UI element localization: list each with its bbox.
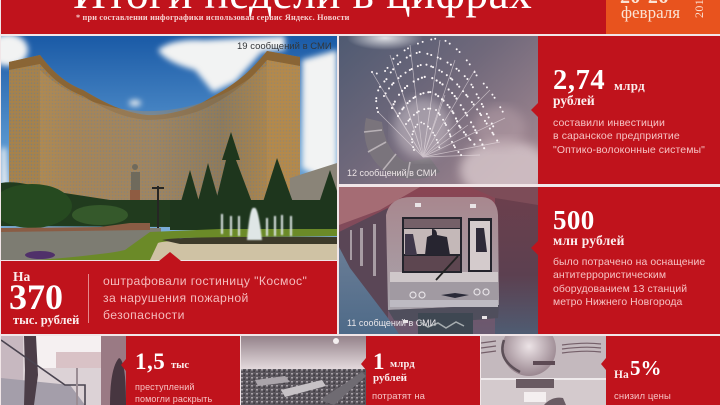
investment text — [553, 117, 705, 156]
caption: 11 messages: 11 сообщений в СМИ — [347, 318, 436, 328]
date box — [606, 0, 720, 34]
panel: metro photo — [339, 187, 538, 334]
metro text: антитеррористическим — [553, 270, 666, 281]
metro text: метро Нижнего Новгорода — [553, 297, 682, 308]
fine description — [103, 274, 307, 322]
unit: тыс. рублей — [13, 313, 79, 327]
number 1,5: 1,5 — [135, 349, 165, 374]
crimes text: помогли раскрыть — [135, 394, 212, 404]
unit rubles: рублей — [553, 93, 595, 108]
price text: снизил цены — [614, 391, 671, 402]
caption: 19 messages: 19 сообщений в СМИ — [237, 41, 332, 52]
panel: price cut — [606, 336, 720, 405]
number block — [9, 269, 79, 327]
unit rubles: рублей — [373, 372, 407, 384]
unit: тыс — [171, 360, 189, 371]
caption: 12 messages: 12 сообщений в СМИ — [347, 168, 437, 178]
divider — [88, 274, 89, 323]
number 5%: 5% — [630, 356, 662, 380]
panel: city photo — [241, 336, 366, 405]
pointer — [159, 252, 181, 261]
unit: млн рублей — [553, 233, 625, 248]
panel: hotel photo — [1, 36, 337, 260]
fiber hub ring — [364, 118, 440, 179]
investment text: в саранское предприятие — [553, 130, 680, 142]
number 1: 1 — [373, 349, 384, 374]
panel: one billion — [366, 336, 480, 405]
fine description: безопасности — [103, 308, 185, 322]
fine description: оштрафовали гостиницу "Космос" — [103, 274, 307, 288]
pointer — [531, 103, 538, 117]
panel: investment — [538, 36, 720, 184]
unit billion: млрд — [390, 359, 415, 370]
pointer — [531, 241, 538, 255]
footnote: * при составлении инфографики использован сервис Яндекс. Новости — [76, 13, 350, 22]
spending text: потратят на — [372, 391, 425, 402]
statue — [130, 164, 140, 224]
number 500: 500 — [553, 205, 595, 235]
pointer — [121, 359, 126, 371]
number 2,74: 2,74 — [553, 65, 605, 96]
metro text — [553, 257, 705, 308]
lamp post — [152, 186, 164, 238]
investment text: составили инвестиции — [553, 117, 665, 129]
fine description: за нарушения пожарной — [103, 291, 249, 305]
panel: crimes solved — [126, 336, 240, 405]
pointer — [361, 358, 366, 370]
panel: staircase photo — [1, 336, 126, 405]
crimes text: преступлений — [135, 382, 194, 392]
panel: hotel fine — [1, 261, 337, 334]
month: февраля — [621, 3, 680, 22]
number 370: 370 — [9, 277, 63, 317]
metro text: оборудованием 13 станций — [553, 284, 687, 295]
prefix: На — [13, 269, 30, 284]
unit billion: млрд — [614, 78, 645, 93]
header band — [1, 0, 720, 34]
panel: fiber optics photo — [339, 36, 538, 184]
panel: globe photo — [481, 336, 606, 405]
panel: metro spending — [538, 187, 720, 334]
prefix: На — [614, 369, 629, 381]
crimes text — [135, 382, 212, 404]
metro text: было потрачено на оснащение — [553, 257, 705, 268]
pointer — [601, 358, 606, 370]
investment text: "Оптико-волоконные системы" — [553, 144, 705, 156]
